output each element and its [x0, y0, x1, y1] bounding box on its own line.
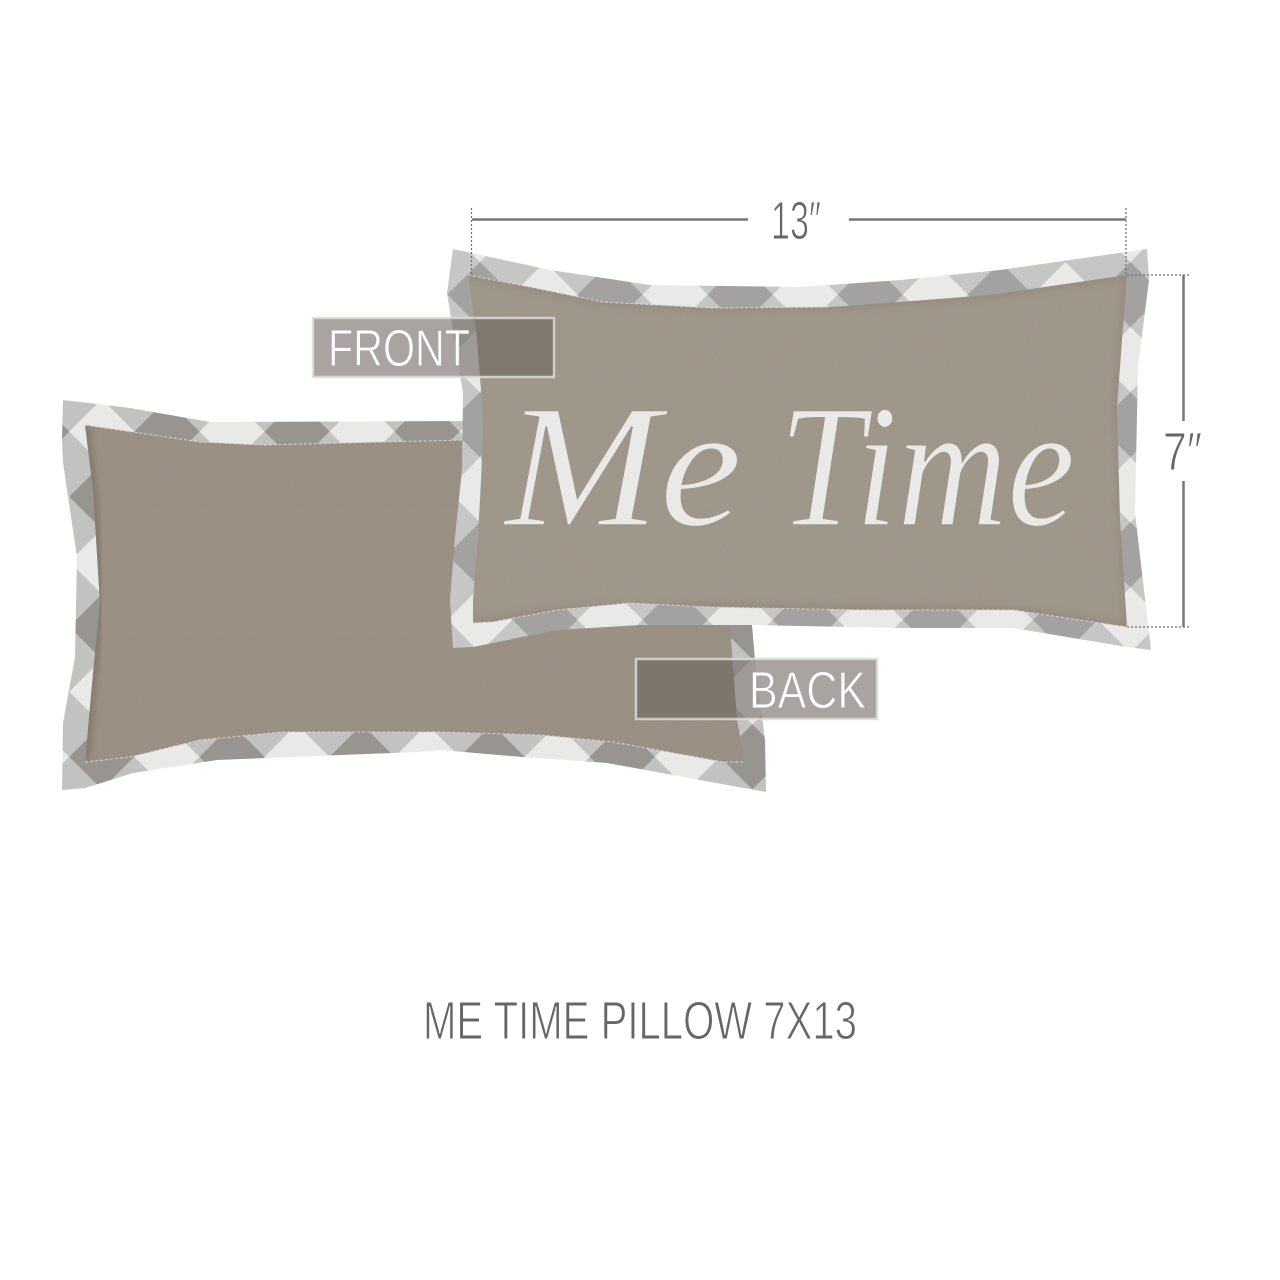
width right dotted guide [1125, 208, 1127, 275]
back pillow [60, 400, 770, 800]
back label box [636, 659, 877, 719]
height value: 7″ [1163, 422, 1202, 482]
front pillow fabric [468, 275, 1127, 627]
height line top [1182, 275, 1185, 421]
front label text: FRONT [328, 320, 470, 378]
title: ME TIME PILLOW 7X13 [423, 991, 857, 1051]
front pillow [447, 249, 1151, 650]
front pillow stitching [468, 275, 1127, 627]
back pillow stitching [85, 425, 745, 762]
back label text: BACK [749, 662, 866, 720]
front pillow print: Me Time: Me [502, 369, 742, 563]
front pillow gingham border [447, 249, 1151, 650]
back pillow fabric [85, 425, 752, 762]
height bottom dotted guide [1127, 626, 1191, 628]
front pillow print: Me Time: Time [779, 369, 1075, 563]
back label [636, 659, 877, 720]
front pillow texture [472, 276, 1127, 626]
height line bottom [1182, 481, 1185, 627]
back pillow texture [85, 426, 102, 762]
back pillow gingham border [62, 400, 766, 792]
width line right [849, 218, 1126, 221]
height top dotted guide [1127, 274, 1191, 276]
width line left [472, 218, 748, 221]
width left dotted guide [470, 208, 472, 275]
front label box [313, 318, 554, 377]
front label [313, 318, 554, 378]
width value: 13″ [771, 191, 821, 251]
front pillow print: Me Time [502, 369, 1075, 563]
